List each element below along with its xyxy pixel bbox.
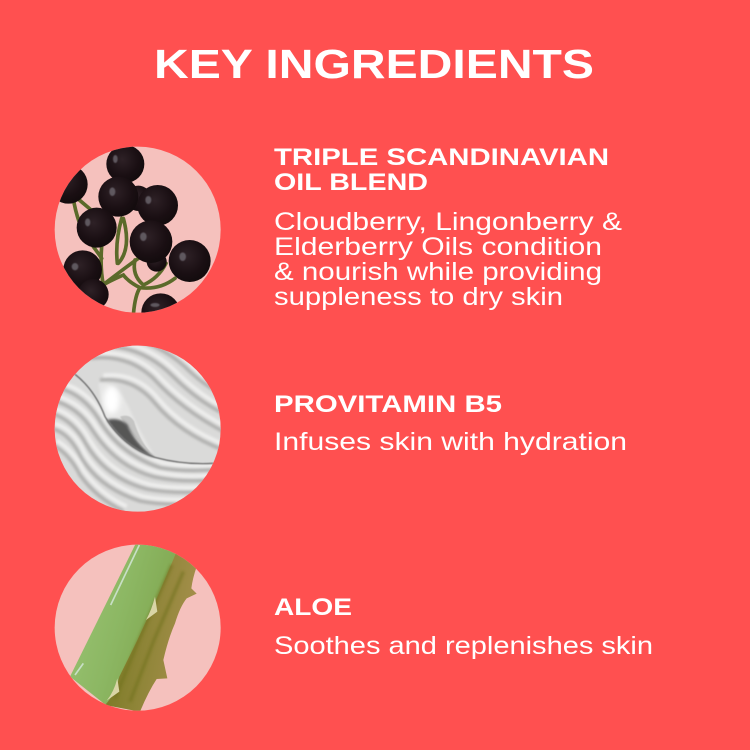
text: aloe description: Soothes and replenishes skin <box>274 632 653 660</box>
title: KEY INGREDIENTS <box>154 41 594 87</box>
text: berry description: suppleness to dry skin <box>274 283 563 311</box>
heading: second line: OIL BLEND <box>274 169 428 196</box>
heading: triple scandinavian oil blend: TRIPLE SCANDINAVIAN <box>274 144 609 171</box>
heading: provitamin b5: PROVITAMIN B5 <box>274 391 502 418</box>
heading: aloe: ALOE <box>274 594 352 621</box>
text: berry description: & nourish while providing <box>274 258 602 286</box>
text: berry description <box>274 208 622 311</box>
icon: cream swirl photo circle <box>54 346 221 512</box>
text: provitamin description: Infuses skin with hydration <box>274 428 627 456</box>
icon: elderberry photo circle <box>54 146 221 313</box>
icon: aloe stem photo circle <box>55 542 221 712</box>
text: berry description: Elderberry Oils condition <box>274 233 602 261</box>
text: berry description: Cloudberry, Lingonberry & <box>274 208 622 236</box>
